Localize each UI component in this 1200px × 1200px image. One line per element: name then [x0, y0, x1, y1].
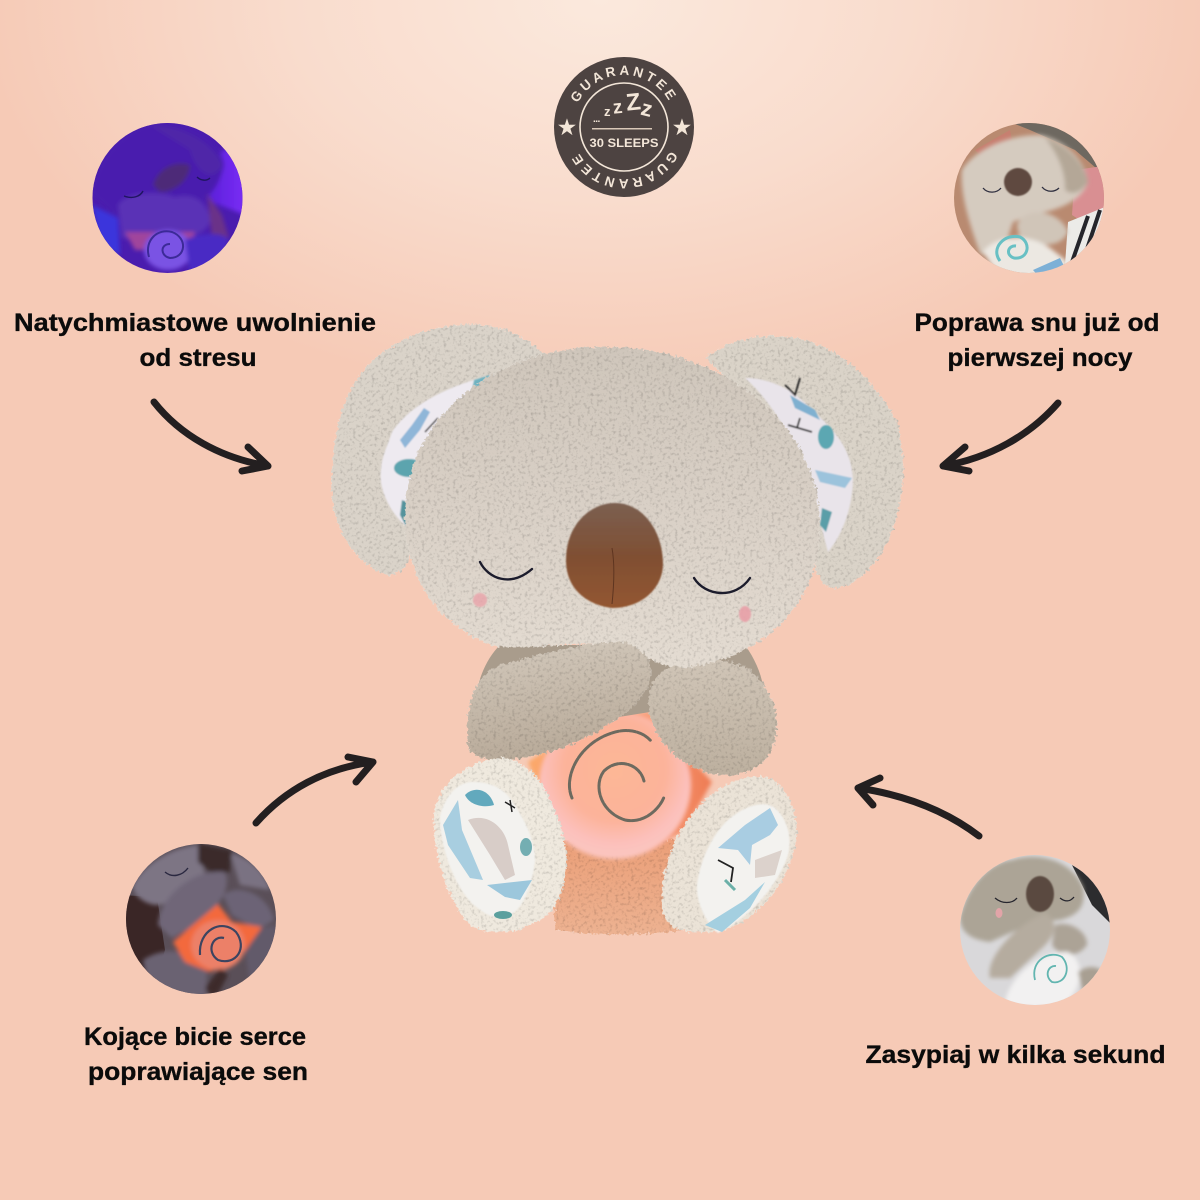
left arm [467, 642, 651, 760]
label: better sleep: pierwszej nocy [948, 344, 1133, 372]
badge label: 30 SLEEPS [590, 136, 658, 150]
lower belly [555, 840, 680, 934]
koala plush [332, 324, 903, 935]
photo: sleeping koala [960, 855, 1110, 1005]
label: soothing heartbeat [84, 1023, 308, 1086]
right ear [706, 336, 903, 588]
badge stars: ★ [673, 117, 691, 139]
nose [566, 503, 663, 608]
badge sleep letters: z [612, 97, 624, 119]
arrow: top right [943, 403, 1058, 471]
torso behind arms [475, 645, 764, 743]
belly pink spot [539, 711, 691, 859]
badge sleep letters: Z [625, 88, 642, 117]
badge sleep letters: z [639, 95, 655, 122]
label: stress relief [14, 309, 376, 372]
right cheek [739, 606, 751, 622]
left ear [332, 324, 545, 575]
badge stars: ★ [558, 117, 576, 139]
photo: glowing heartbeat [126, 844, 276, 994]
label: stress relief: od stresu [140, 344, 256, 372]
right eye [694, 578, 750, 593]
left foot [434, 758, 566, 932]
glowing belly wings [528, 712, 712, 850]
label: soothing heartbeat: poprawiające sen [88, 1058, 308, 1086]
right ear print [745, 378, 853, 552]
left cheek [473, 593, 487, 607]
belly spiral [569, 731, 664, 821]
head [405, 347, 820, 667]
arrow: bottom left [256, 757, 373, 823]
photo: koala held by child [954, 123, 1104, 273]
label: stress relief: Natychmiastowe uwolnienie [14, 309, 376, 337]
label: better sleep [914, 309, 1160, 372]
arrow: top left [154, 402, 268, 471]
badge sleep letters: z [604, 104, 611, 119]
left ear print [381, 374, 494, 526]
badge text: top arc: GUARANTEE [572, 66, 676, 102]
badge sleep letters [593, 88, 655, 125]
label: fall asleep: Zasypiaj w kilka sekund [866, 1041, 1166, 1069]
label: soothing heartbeat: Kojące bicie serce [84, 1023, 306, 1051]
right foot [662, 777, 797, 933]
guarantee badge [554, 57, 694, 197]
label: better sleep: Poprawa snu już od [914, 309, 1160, 337]
arrow: bottom right [858, 778, 979, 836]
badge sleep letters: ... [593, 114, 601, 125]
right arm [648, 660, 777, 775]
photo: purple night light [90, 120, 245, 275]
left eye [480, 562, 532, 579]
badge text: bottom arc: GUARANTEE [572, 152, 676, 188]
